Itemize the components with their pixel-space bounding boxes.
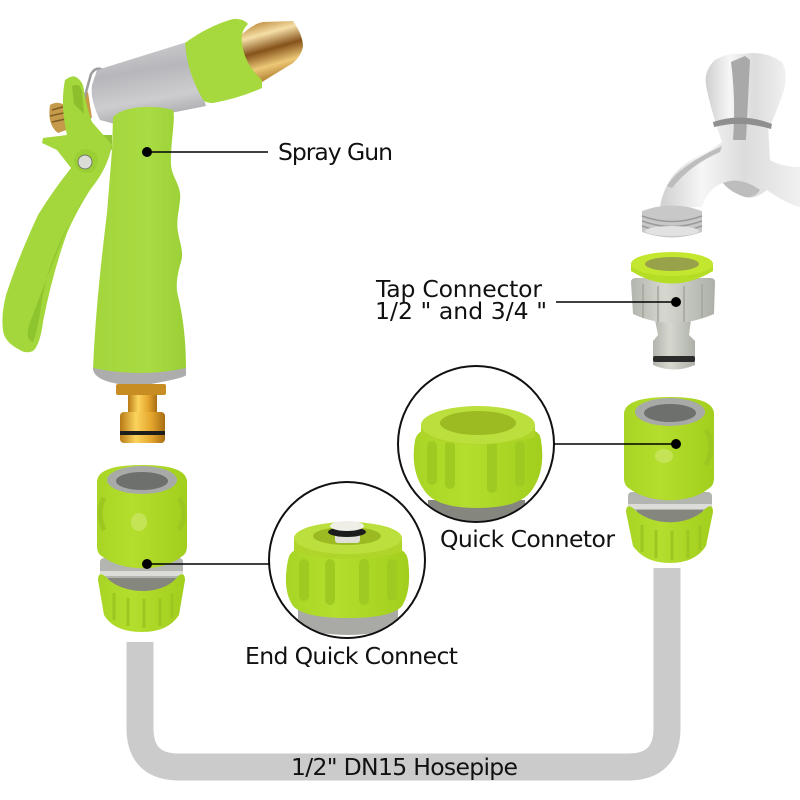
label: tap connector: 1/2 " and 3/4 ": [375, 297, 547, 325]
icon: trigger pivot bolt: [74, 149, 98, 173]
tap connector: [631, 252, 715, 370]
ribbed nut: [414, 428, 542, 508]
gun handle: [93, 107, 186, 375]
label: hosepipe: 1/2" DN15 Hosepipe: [291, 753, 518, 781]
nut: [98, 574, 185, 632]
rim: [635, 398, 705, 426]
spray gun: [2, 19, 303, 443]
nut: [626, 506, 713, 563]
detail circle: end quick connect: [269, 482, 425, 638]
right quick connector: [624, 397, 714, 563]
tap collar: [713, 117, 772, 129]
body: [624, 397, 714, 500]
connector grey nut: [631, 278, 715, 323]
label: quick connector: Quick Connetor: [440, 525, 615, 553]
connector green ring: [631, 252, 713, 284]
detail circle: quick connector: [398, 366, 554, 524]
threads: [100, 558, 183, 593]
tap head: [706, 53, 786, 124]
gun barrel: [92, 42, 206, 124]
tap thread: [642, 206, 702, 238]
grey base: [428, 500, 525, 521]
tap head shading: [731, 56, 750, 140]
connector bottom spigot: [653, 320, 695, 370]
pin: [328, 521, 366, 543]
circle outline: [398, 366, 554, 522]
tap arm and spout: [660, 125, 800, 208]
callout: tap connector: [556, 297, 681, 307]
gun brass fitting: [116, 384, 166, 443]
ribs: [432, 446, 520, 488]
body: [97, 465, 187, 568]
icon: gun brass screw: [49, 92, 92, 133]
label: tap connector: Tap Connector: [375, 275, 542, 303]
label: tap connector: [375, 275, 547, 325]
left quick connector: [97, 465, 187, 632]
callout: end quick connect: [142, 559, 270, 569]
top cap: [421, 406, 535, 444]
rim: [107, 466, 177, 494]
ribbed nut: [286, 548, 409, 618]
hosepipe: [140, 568, 667, 767]
water tap: [642, 53, 800, 238]
threads: [628, 492, 712, 524]
ribs: [304, 564, 392, 600]
gun nozzle: [238, 21, 303, 82]
icon: gun wire ring: [83, 69, 103, 103]
label: end quick connect: End Quick Connect: [245, 642, 458, 670]
gun grey band: [93, 368, 186, 386]
label: spray gun: Spray Gun: [278, 138, 393, 166]
tap body shading: [667, 146, 760, 197]
gun collar: [185, 19, 262, 103]
callout: spray gun: [142, 147, 268, 157]
callout: quick connector: [554, 439, 681, 449]
circle outline: [269, 482, 425, 638]
grey base: [298, 608, 398, 635]
top cap: [294, 522, 402, 559]
gun trigger: [2, 76, 112, 352]
